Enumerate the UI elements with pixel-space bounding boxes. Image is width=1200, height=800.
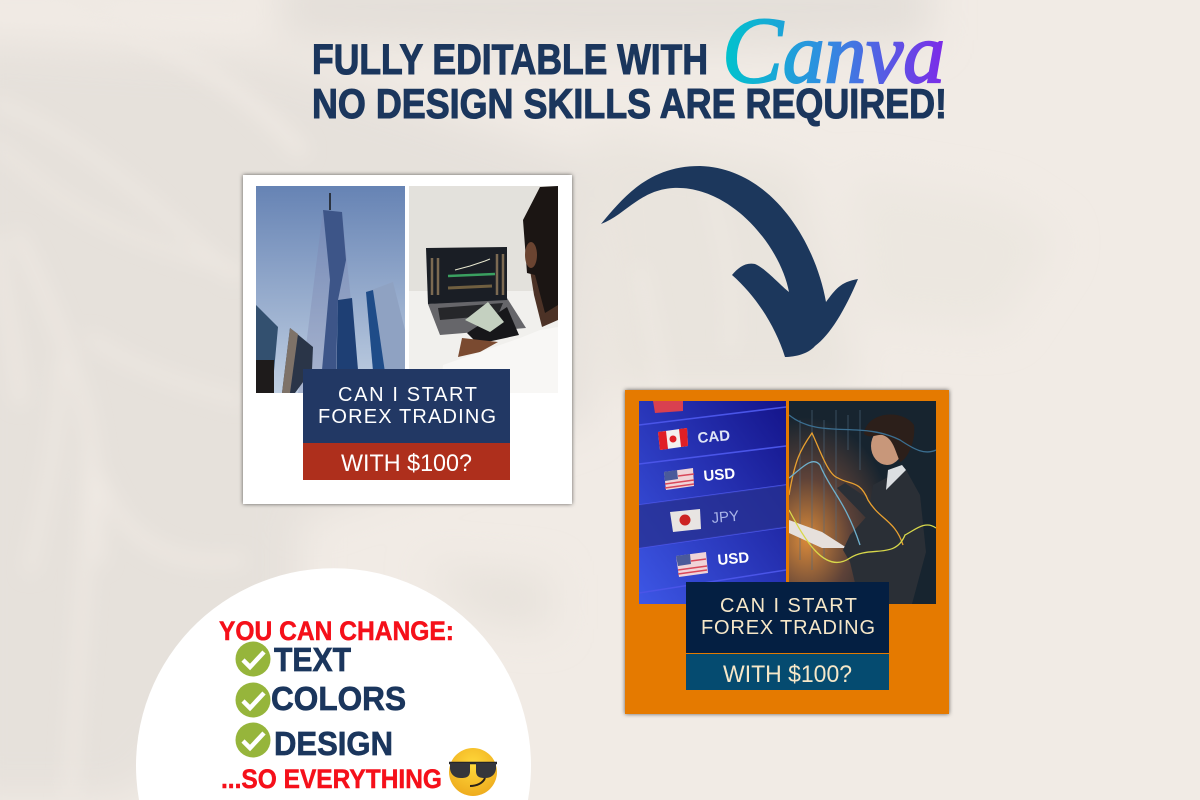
background with soft leaf shadow [0, 0, 920, 790]
item: design: DESIGN [274, 726, 393, 763]
panel: original white template [243, 175, 572, 504]
icon: sunglasses emoji [449, 748, 497, 796]
photo: currency board [639, 401, 786, 604]
photo: currency board: USD [717, 549, 750, 569]
item: colors: COLORS [271, 681, 406, 718]
photo: businessman with chart overlay [789, 401, 936, 604]
flag: United States [676, 552, 708, 577]
arrow: curved navy arrow pointing to edited template [601, 166, 858, 357]
title banner: dark navy and teal: WITH $100? [723, 661, 852, 688]
heading: you can change: YOU CAN CHANGE: [219, 616, 454, 646]
photo: currency board: JPY [711, 508, 740, 527]
title banner: navy and red: CAN I START [338, 384, 477, 406]
title banner: navy and red: FOREX TRADING [318, 406, 496, 428]
item: text: TEXT [274, 642, 351, 679]
canva logo wordmark: Canva [722, 0, 945, 103]
photo: skyscrapers [256, 186, 405, 393]
photo: currency board: USD [703, 465, 736, 485]
heading: NO DESIGN SKILLS ARE REQUIRED! [312, 80, 947, 127]
heading [312, 36, 947, 127]
title banner: dark navy and teal: FOREX TRADING [701, 617, 875, 639]
flag: United States [664, 468, 694, 490]
title banner: dark navy and teal: CAN I START [720, 595, 857, 617]
photo: currency board: CAD [697, 427, 731, 447]
title banner: dark navy and teal [686, 582, 889, 690]
flag: Japan [670, 509, 701, 532]
title banner: navy and red [303, 369, 510, 480]
callout: you can change list [136, 568, 531, 800]
item: text [236, 642, 351, 679]
flag: Canada [658, 428, 688, 450]
panel: edited orange template [625, 390, 949, 714]
photo: trader with laptop and cash [409, 186, 558, 393]
item: design [236, 722, 393, 763]
title banner: navy and red: WITH $100? [341, 450, 472, 477]
text: so everything: ...SO EVERYTHING [221, 764, 442, 794]
heading: FULLY EDITABLE WITH [312, 36, 708, 84]
